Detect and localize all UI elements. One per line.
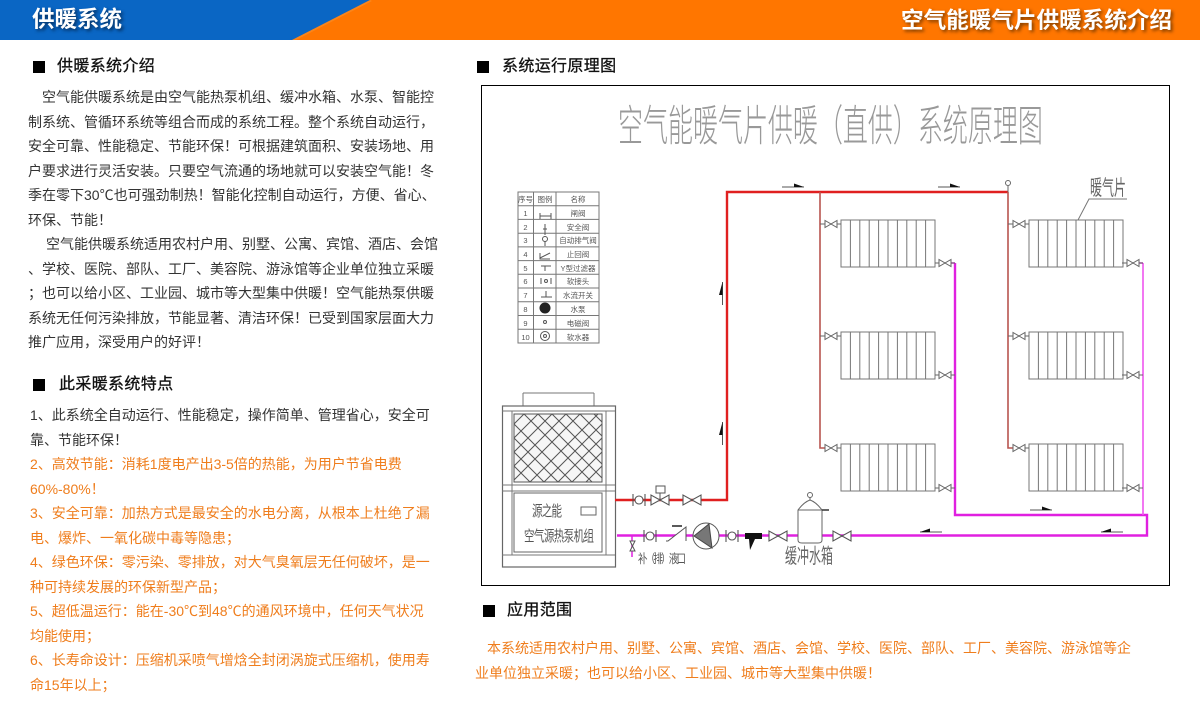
drain label: 补（排）液口 — [638, 551, 686, 566]
text block: system features: 1、此系统全自动运行、性能稳定，操作简单、管理省心，安全可 — [30, 407, 430, 423]
text block: system features: 均能使用； — [30, 628, 100, 644]
header band — [0, 0, 1200, 40]
heading: schematic: 系统运行原理图 — [502, 58, 616, 75]
heading: heating system intro: 供暖系统介绍 — [57, 58, 155, 75]
text block: system features: 2、高效节能：消耗1度电产出3-5倍的热能，为用户节省电费 — [30, 456, 402, 472]
buffer tank — [785, 492, 833, 568]
text block: heating system intro: 、学校、医院、部队、工厂、美容院、游泳馆等企业单位独立采暖 — [28, 261, 434, 277]
page title: 空气能暖气片供暖系统介绍 — [901, 8, 1172, 33]
legend table: 5 — [523, 264, 528, 273]
text block: system features: 电、爆炸、一氧化碳中毒等隐患； — [30, 530, 240, 546]
text block: heating system intro: 环保、节能！ — [28, 212, 112, 228]
legend table: 4 — [523, 250, 528, 259]
heading: system features: 此采暖系统特点 — [59, 376, 173, 393]
text block: heating system intro: 推广应用，深受用户的好评！ — [28, 334, 210, 350]
text block: heating system intro: 安全可靠、性能稳定、节能环保！可根据建筑面积、安装场地、用 — [28, 138, 434, 154]
legend table: 软接头 — [567, 276, 590, 286]
diagram title: 空气能暖气片供暖（直供）系统原理图 — [618, 103, 1043, 151]
text block: system features: 60%-80%！ — [30, 481, 105, 497]
text block: system features: 命15年以上； — [30, 677, 116, 693]
legend table: 6 — [523, 277, 528, 286]
text block: heating system intro: 制系统、管循环系统等组合而成的系统工程。整个系统自动运行， — [28, 114, 434, 130]
legend table: 2 — [523, 223, 528, 232]
legend table: 安全阀 — [567, 222, 589, 232]
text block: heating system intro: 空气能供暖系统是由空气能热泵机组、缓冲水箱、水泵、智能控 — [42, 89, 434, 105]
legend table: 软水器 — [567, 332, 590, 342]
red supply pipe — [615, 192, 1014, 500]
radiators — [820, 220, 1143, 492]
heat pump unit: 源之能 — [532, 502, 562, 519]
text block: application scope — [475, 640, 1131, 681]
text block: application scope: 本系统适用农村户用、别墅、公寓、宾馆、酒店、会馆、学校、医院、部队、工厂、美容院、游泳馆等企 — [487, 640, 1131, 656]
legend table: 电磁阀 — [567, 318, 589, 328]
text block: system features — [30, 407, 430, 693]
pipeline valves and pump — [630, 486, 851, 551]
text block: heating system intro: 系统无任何污染排放，节能显著、清洁环保！已受到国家层面大力 — [28, 310, 434, 326]
heading: application scope — [483, 601, 572, 619]
heat pump unit: 空气源热泵机组 — [524, 527, 594, 544]
radiator label: 暖气片 — [1090, 177, 1126, 200]
section title: 供暖系统 — [32, 7, 122, 32]
magenta return pipe — [617, 263, 1147, 557]
text block: application scope: 业单位独立采暖；也可以给小区、工业园、城市等大型集中供暖！ — [475, 665, 881, 681]
legend table: 1 — [523, 209, 528, 218]
legend table: 名称 — [570, 194, 586, 204]
legend table: 闸阀 — [570, 209, 586, 218]
text block: heating system intro: 空气能供暖系统适用农村户用、别墅、公寓、宾馆、酒店、会馆 — [46, 236, 438, 252]
legend table: 水流开关 — [563, 290, 593, 300]
legend table: 自动排气阀 — [559, 235, 597, 245]
legend table — [518, 192, 599, 343]
legend table: 10 — [521, 333, 530, 342]
heading: application scope: 应用范围 — [507, 602, 572, 619]
text block: system features: 3、安全可靠：加热方式是最安全的水电分离，从根本上杜绝了漏 — [30, 505, 430, 521]
legend table: 8 — [523, 305, 528, 314]
heat pump unit — [502, 393, 616, 567]
radiator label — [1078, 177, 1127, 220]
legend table: 序号 — [518, 194, 533, 204]
air vent — [1006, 180, 1010, 192]
text block: heating system intro — [28, 89, 438, 350]
legend table: 水泵 — [570, 304, 586, 314]
text block: heating system intro: ；也可以给小区、工业园、城市等大型集中供暖！空气能热泵供暖 — [28, 285, 434, 301]
buffer tank: 缓冲水箱 — [785, 545, 833, 568]
text block: heating system intro: 户要求进行灵活安装。只要空气流通的场地就可以安装空气能！冬 — [28, 163, 434, 179]
text block: heating system intro: 季在零下30℃也可强劲制热！智能化控制自动运行，方便、省心、 — [28, 187, 436, 203]
legend table: 9 — [523, 319, 528, 328]
text block: system features: 种可持续发展的环保新型产品； — [30, 579, 226, 595]
legend table: 止回阀 — [567, 249, 589, 259]
legend table: 7 — [523, 291, 528, 300]
legend table: Y型过滤器 — [560, 263, 596, 273]
text block: system features: 靠、节能环保！ — [30, 432, 128, 448]
text block: system features: 6、长寿命设计：压缩机采喷气增焓全封闭涡旋式压缩机，使用寿 — [30, 652, 430, 668]
legend table: 3 — [523, 236, 528, 245]
flow arrows — [719, 184, 1123, 532]
text block: system features: 4、绿色环保：零污染、零排放，对大气臭氧层无任何破坏，是一 — [30, 554, 430, 570]
text block: system features: 5、超低温运行：能在-30℃到48℃的通风环境中，任何天气状况 — [30, 603, 424, 619]
legend table: 图例 — [538, 194, 552, 204]
